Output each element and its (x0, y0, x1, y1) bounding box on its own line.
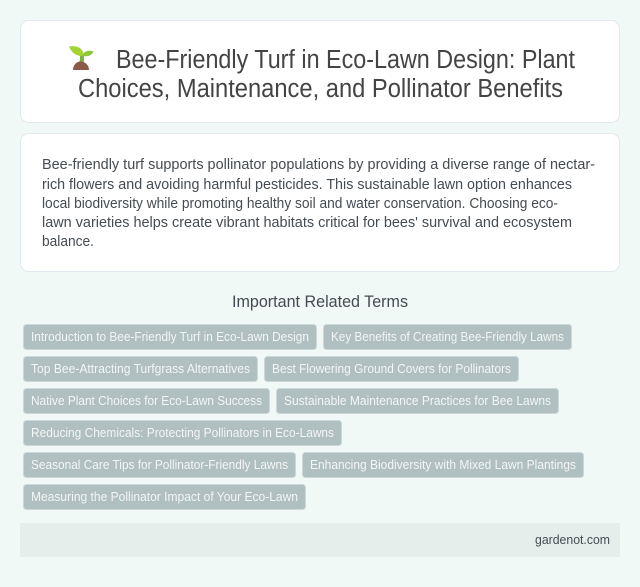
title: Choices, Maintenance, and Pollinator Benefits (78, 75, 563, 103)
heading: important related terms: Important Related Terms (232, 293, 408, 311)
text block: description: local biodiversity while promoting healthy soil and water conservation. Choosing eco- (42, 195, 558, 212)
tag (302, 452, 584, 478)
tag: Introduction to Bee-Friendly Turf in Eco-Lawn Design (31, 330, 309, 344)
title: Bee-Friendly Turf in Eco-Lawn Design: Plant (116, 46, 575, 74)
text block: description: balance. (42, 233, 94, 250)
tag list (24, 324, 584, 510)
tag: Seasonal Care Tips for Pollinator-Friendly Lawns (31, 458, 288, 472)
tag (264, 356, 518, 382)
tag: Best Flowering Ground Covers for Pollinators (272, 362, 511, 376)
text block: description: lawn varieties helps create vibrant habitats critical for bees' survival and ecosystem (42, 214, 572, 231)
text block: description: Bee-friendly turf supports pollinator populations by providing a diverse range of nectar- (42, 156, 595, 173)
icon: sprout (69, 46, 94, 70)
tag: Top Bee-Attracting Turfgrass Alternatives (31, 362, 250, 376)
tag: Key Benefits of Creating Bee-Friendly Lawns (331, 330, 564, 344)
title (78, 46, 575, 103)
panel: description card (20, 134, 620, 272)
footer: gardenot.com (535, 533, 610, 547)
tag (24, 420, 342, 446)
tag (24, 356, 258, 382)
tag (276, 388, 558, 414)
tag (24, 484, 306, 510)
tag: Reducing Chemicals: Protecting Pollinators in Eco-Lawns (31, 426, 334, 440)
tag (324, 324, 572, 350)
tag: Measuring the Pollinator Impact of Your Eco-Lawn (31, 490, 298, 504)
tag: Native Plant Choices for Eco-Lawn Success (31, 394, 262, 408)
tag: Enhancing Biodiversity with Mixed Lawn Plantings (310, 458, 576, 472)
footer (20, 523, 620, 557)
text block: description: rich flowers and avoiding harmful pesticides. This sustainable lawn option enhances (42, 176, 572, 193)
tag: Sustainable Maintenance Practices for Bee Lawns (284, 394, 551, 408)
tag (24, 388, 270, 414)
panel: title card (20, 20, 620, 122)
tag (24, 324, 316, 350)
text block: description (42, 156, 595, 250)
tag (24, 452, 296, 478)
